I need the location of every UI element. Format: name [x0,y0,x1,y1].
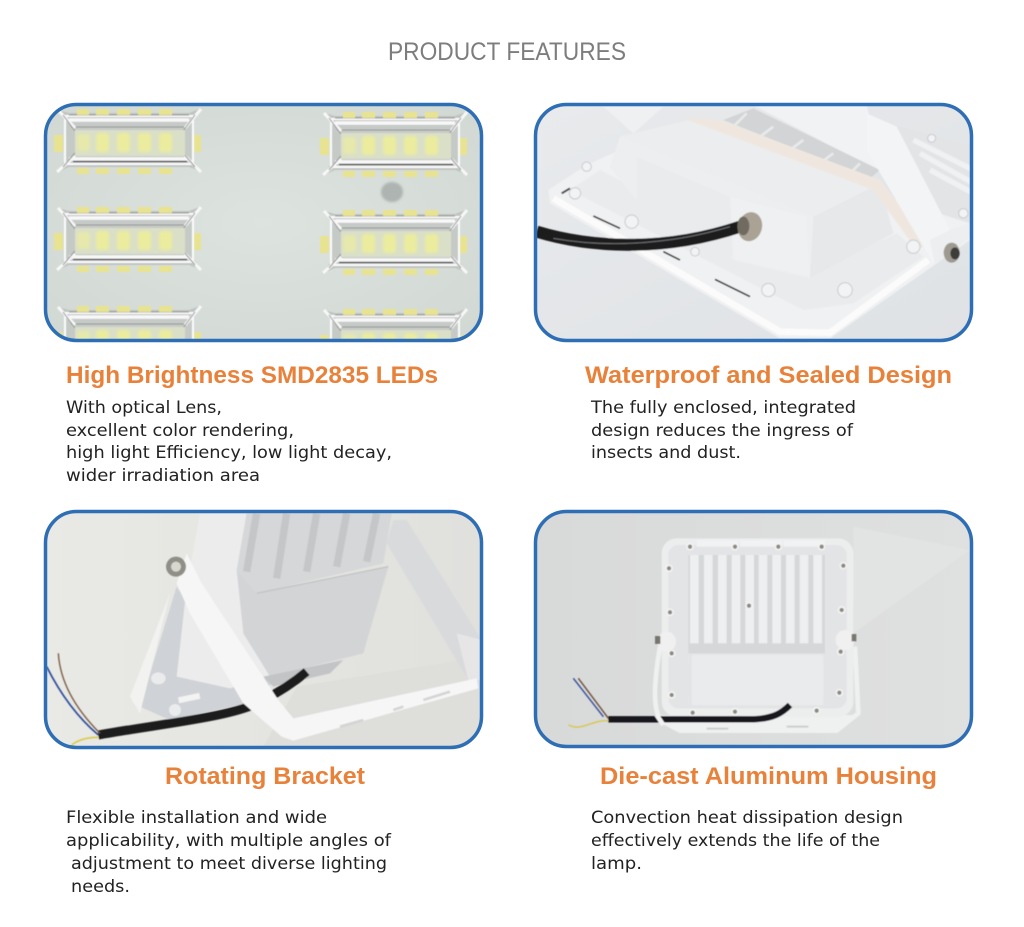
text block: rotating bracket description: needs. [71,877,130,897]
title: PRODUCT FEATURES [388,38,626,66]
panel: rotating bracket photo [44,511,483,749]
text block: rotating bracket description: Flexible installation and wide [66,808,327,828]
text block: rotating bracket description: adjustment to meet diverse lighting [71,854,387,874]
text block: waterproof description: The fully enclosed, integrated [590,398,856,418]
text block: rotating bracket description [66,808,392,897]
heading: rotating bracket: Rotating Bracket [165,763,365,790]
text block: die-cast housing description: effectively extends the life of the [591,831,880,851]
text block: high brightness description: high light Efficiency, low light decay, [66,443,392,463]
text block: high brightness description: With optical Lens, [66,398,222,418]
text block: waterproof description: design reduces the ingress of [591,421,854,441]
panel: aluminum housing photo [534,511,973,748]
text block: waterproof description: insects and dust. [591,443,741,463]
text block: die-cast housing description: lamp. [591,854,642,874]
heading: waterproof: Waterproof and Sealed Design [585,362,952,389]
text block: high brightness description: excellent color rendering, [66,421,294,441]
text block: rotating bracket description: applicability, with multiple angles of [66,831,392,851]
heading: high brightness: High Brightness SMD2835 LEDs [66,362,438,389]
text block: high brightness description: wider irradiation area [66,466,260,486]
text block: high brightness description [66,398,392,486]
text block: die-cast housing description: Convection heat dissipation design [591,808,903,828]
panel: LED photo [44,102,484,342]
heading: die-cast housing: Die-cast Aluminum Housing [600,763,937,790]
text block: die-cast housing description [591,808,903,874]
text block: waterproof description [590,398,856,463]
panel: sealed housing photo [534,103,973,342]
